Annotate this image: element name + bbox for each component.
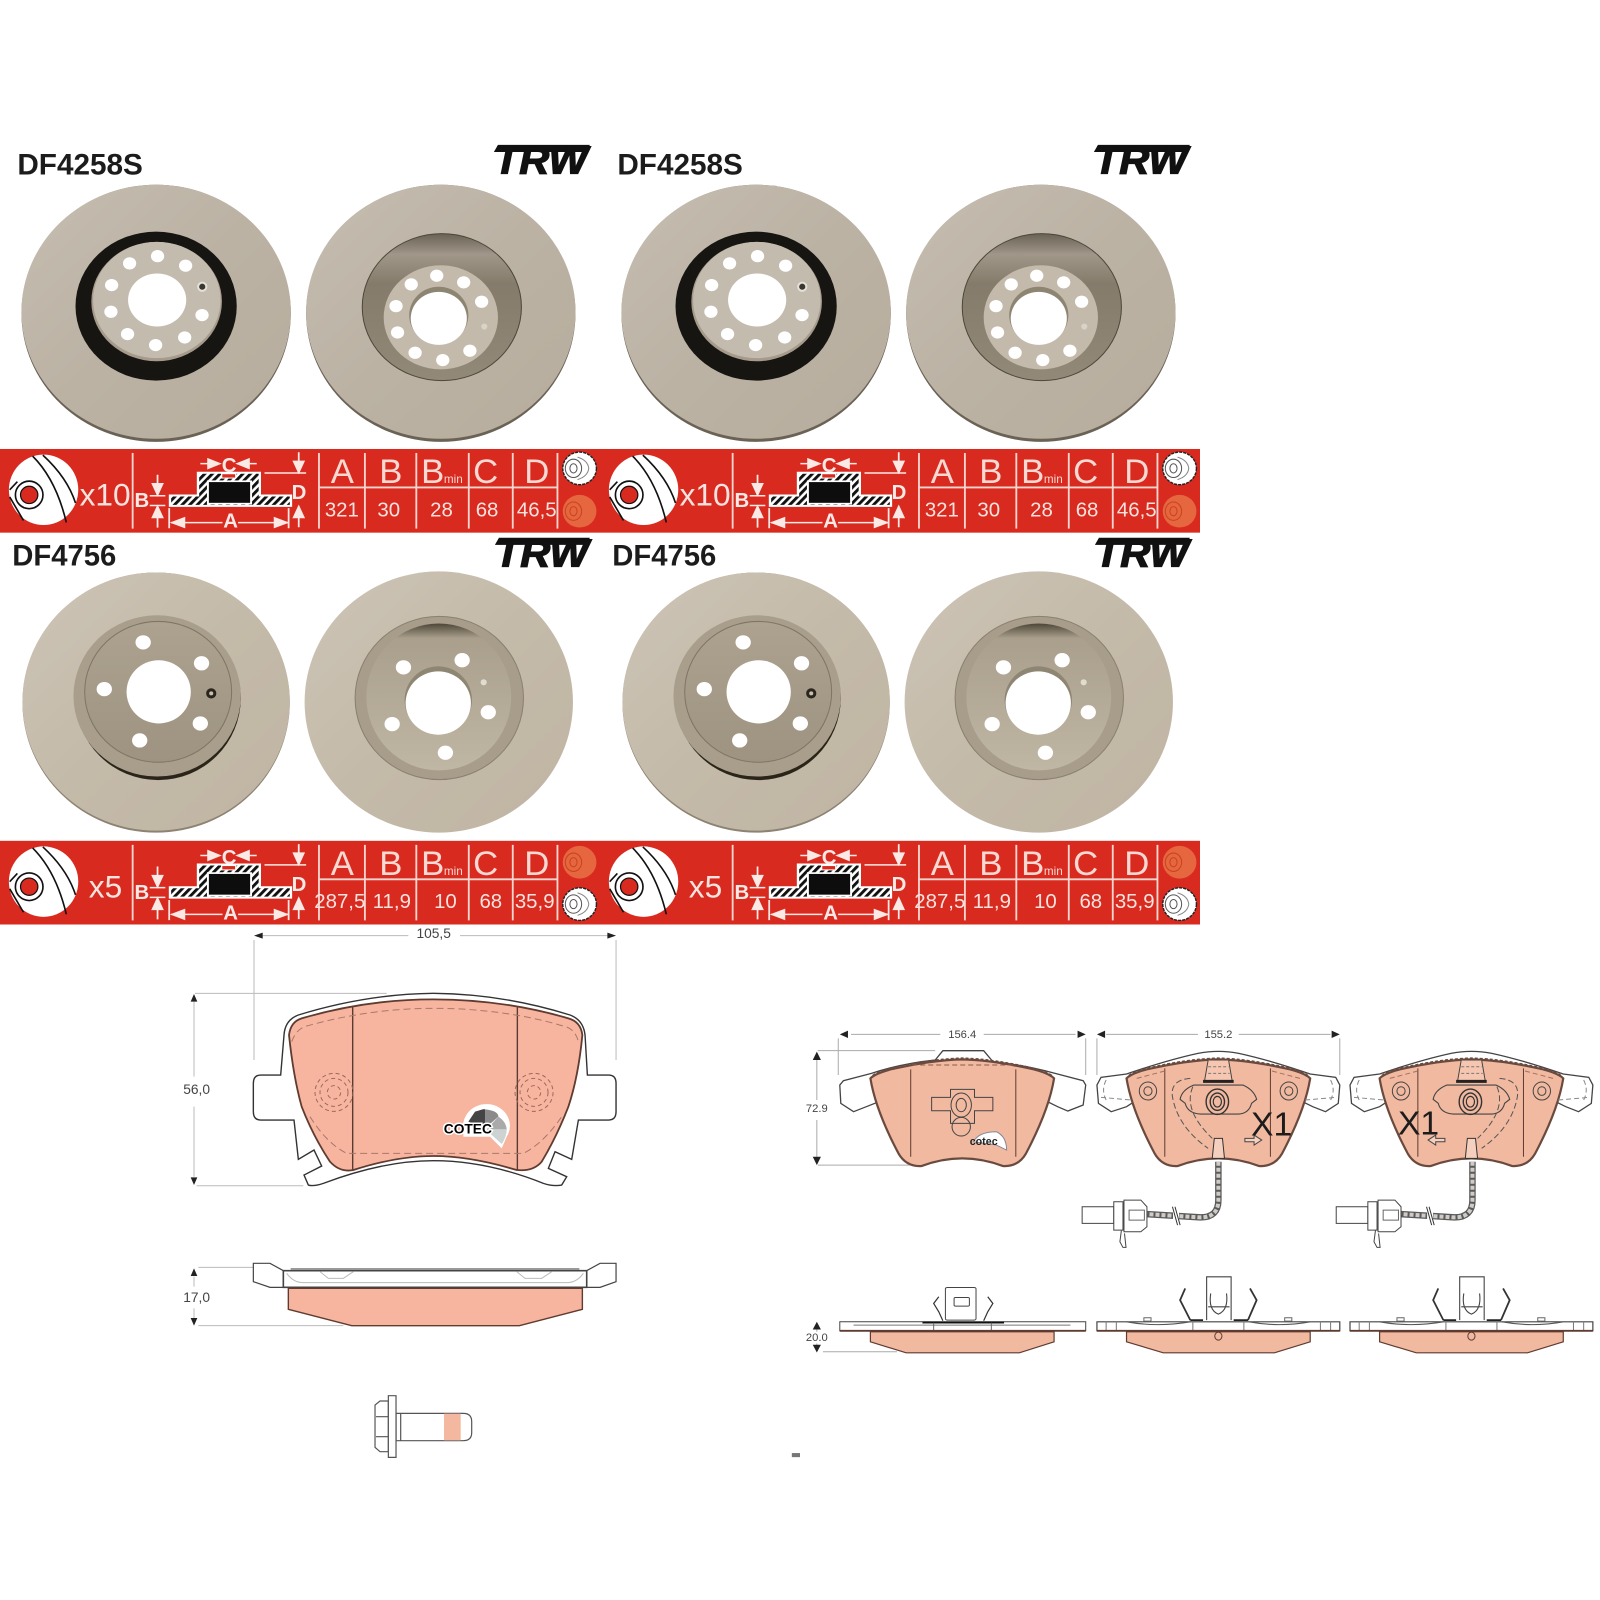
spec band: DF4756 right: 10 [1034, 891, 1057, 913]
spec band: DF4756 left: 35,9 [515, 891, 555, 913]
logo mark: COTEC fan [463, 1104, 510, 1148]
pad slots and dashed contours [292, 1007, 578, 1170]
spec band: DF4756 left: C [222, 847, 237, 869]
logo: TRW row 2 right: TRW [1095, 532, 1192, 575]
spec band: DF4258S right: x10 [680, 477, 731, 513]
spec band: DF4258S right: D [892, 482, 906, 504]
backing plate [253, 993, 616, 1186]
spec band: DF4756 right: 35,9 [1115, 891, 1155, 913]
spec band: DF4258S left: B [134, 490, 149, 512]
spec band: DF4756 left: x5 [89, 868, 122, 904]
spec band: DF4258S right: 321 [925, 499, 959, 521]
dimension arrows [191, 933, 616, 1185]
front pad with wear sensor, right [1336, 1051, 1593, 1247]
brake disc DF4756 front [22, 572, 290, 833]
spec band: DF4258S left: D [524, 453, 549, 491]
friction material [289, 999, 582, 1171]
side view with clips, left [1097, 1277, 1340, 1353]
part number: DF4258S left: DF4258S [17, 148, 143, 181]
front pad with wear sensor, left [1082, 1051, 1340, 1247]
spec band: DF4258S left: A [223, 511, 238, 533]
spec band: DF4258S left [0, 449, 600, 533]
logo: TRW row 2 left: TRW [495, 532, 592, 575]
spec band: DF4258S left: 28 [430, 499, 453, 521]
brake disc DF4258S rear, second set [906, 185, 1176, 442]
spec band: DF4756 right: B [979, 845, 1002, 883]
brake disc DF4756 front, second set [622, 572, 890, 833]
spec band: DF4756 left: D [292, 874, 306, 896]
part number: DF4756 left: DF4756 [12, 539, 116, 572]
spec band: DF4258S right: 28 [1030, 499, 1053, 521]
label: 105,5 width: 105,5 [416, 926, 451, 941]
small logo: cotec: cotec [970, 1136, 998, 1148]
spec band: DF4756 right [600, 841, 1200, 924]
spec band: DF4258S left: A [331, 453, 355, 491]
spec band: DF4258S right: B [979, 453, 1002, 491]
logo: TRW left: TRW [494, 139, 591, 182]
spec band: DF4756 left: 11,9 [373, 891, 411, 913]
spec band: DF4258S left: 68 [476, 499, 498, 521]
spec band: DF4258S right: C [822, 455, 837, 477]
label: 156.4: 156.4 [948, 1029, 976, 1041]
spec band: DF4756 left: 10 [434, 891, 457, 913]
spec band: DF4756 left [0, 841, 600, 924]
rear brake pad front view [191, 933, 616, 1186]
part number: DF4258S right: DF4258S [617, 148, 743, 181]
brake disc DF4258S front, second set [621, 185, 891, 442]
spec band: DF4258S left: D [292, 482, 306, 504]
mounting bolt [375, 1396, 472, 1457]
spec band: DF4258S right: A [823, 511, 838, 533]
front pad side views [840, 1277, 1593, 1353]
spec band: DF4756 left: B [421, 845, 444, 883]
spec band: DF4756 right: D [892, 874, 906, 896]
brake disc DF4756 rear [305, 571, 573, 833]
spec band: DF4756 right: B [734, 882, 749, 904]
quantity label: X1 right: X1 [1398, 1106, 1439, 1143]
spec band: DF4258S left: 46,5 [517, 499, 557, 521]
thickness dimension [191, 1267, 343, 1326]
spec band: DF4756 right: A [823, 902, 838, 924]
spec band: DF4258S left: min [444, 473, 463, 486]
side view without sensor [840, 1287, 1086, 1353]
spec band: DF4258S right: 30 [977, 499, 1000, 521]
spec band: DF4756 left: C [473, 845, 498, 883]
spec band: DF4258S right: A [931, 453, 955, 491]
spec band: DF4258S left: C [473, 453, 498, 491]
label: 17,0 thickness: 17,0 [183, 1290, 210, 1305]
spec band: DF4258S right: D [1124, 453, 1149, 491]
quantity label: X1 left: X1 [1251, 1107, 1292, 1144]
logo: COTEC: COTEC [444, 1122, 492, 1137]
spec band: DF4756 right: C [1073, 845, 1098, 883]
spec band: DF4258S left: 321 [325, 499, 359, 521]
side plate and ears [253, 1263, 616, 1287]
spec band: DF4258S right: B [1021, 453, 1044, 491]
spec band: DF4258S left: x10 [80, 477, 131, 513]
small cotec mark [973, 1132, 1007, 1150]
spec band: DF4756 right: 68 [1079, 891, 1102, 913]
spec band: DF4258S right [600, 449, 1200, 533]
front pad without sensor [840, 1051, 1086, 1166]
spec band: DF4258S left: C [222, 455, 237, 477]
spec band: DF4756 left: 287,5 [314, 891, 365, 913]
spec band: DF4756 right: D [1124, 845, 1149, 883]
spec band: DF4258S left: 30 [377, 499, 400, 521]
spec band: DF4756 left: D [524, 845, 549, 883]
spec band: DF4756 right: A [931, 845, 955, 883]
spec band: DF4258S right: C [1073, 453, 1098, 491]
brake disc DF4258S rear [306, 185, 576, 442]
front pads dimension lines [813, 1031, 1340, 1352]
spec band: DF4258S right: 46,5 [1117, 499, 1157, 521]
spec band: DF4258S right: B [734, 490, 749, 512]
spec band: DF4756 left: B [379, 845, 402, 883]
brake disc DF4258S front [21, 185, 291, 442]
spec band: DF4756 right: C [822, 847, 837, 869]
spec band: DF4756 left: 68 [479, 891, 502, 913]
label: 72.9: 72.9 [806, 1103, 828, 1115]
spec band: DF4756 right: x5 [689, 868, 722, 904]
spec band: DF4258S right: min [1044, 473, 1063, 486]
label: 155.2: 155.2 [1204, 1029, 1232, 1041]
spec band: DF4258S left: B [379, 453, 402, 491]
spec band: DF4258S right: 68 [1076, 499, 1098, 521]
spec band: DF4756 right: 287,5 [914, 891, 965, 913]
spec band: DF4756 left: B [134, 882, 149, 904]
brake disc DF4756 rear, second set [905, 571, 1173, 833]
rear brake pad side view [191, 1263, 616, 1326]
spec band: DF4756 right: B [1021, 845, 1044, 883]
side friction material [288, 1288, 582, 1326]
label: 20.0: 20.0 [806, 1332, 828, 1344]
label: 56,0 height: 56,0 [183, 1082, 210, 1097]
spec band: DF4756 left: A [331, 845, 355, 883]
spec band: DF4756 right: min [1044, 865, 1063, 878]
logo: TRW right: TRW [1094, 139, 1191, 182]
dimension lines [194, 936, 616, 1186]
spec band: DF4756 right: 11,9 [973, 891, 1011, 913]
spec band: DF4756 left: min [444, 865, 463, 878]
spec band: DF4258S left: B [421, 453, 444, 491]
part number: DF4756 right: DF4756 [612, 539, 716, 572]
centre clip [932, 1089, 993, 1136]
spec band: DF4756 left: A [223, 902, 238, 924]
side view with clips, right [1350, 1277, 1593, 1353]
